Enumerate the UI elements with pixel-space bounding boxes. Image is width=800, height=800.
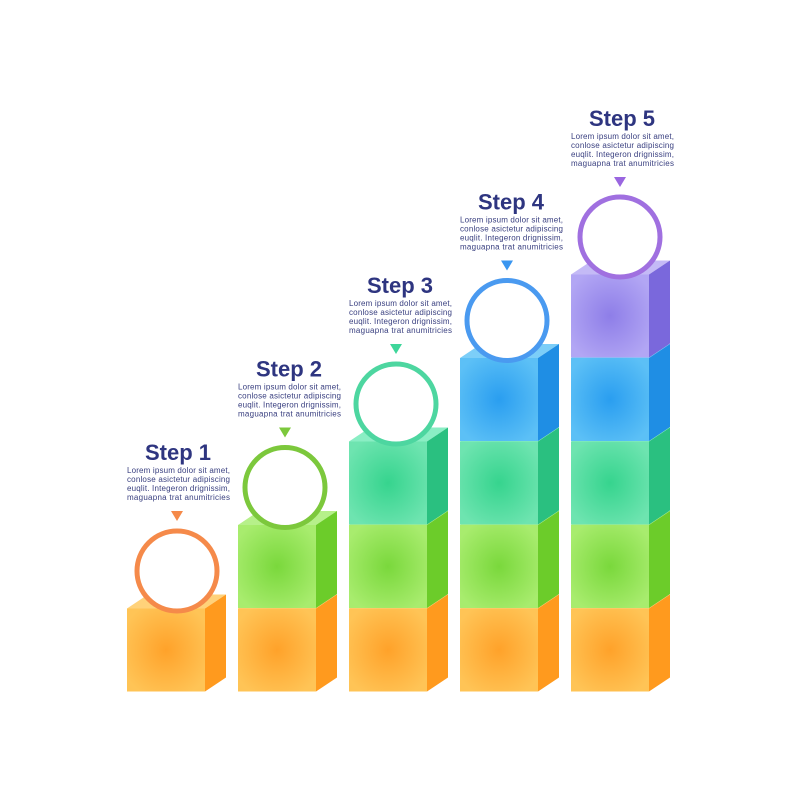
step 1 text: conlose asictetur adipiscing xyxy=(127,475,230,484)
step 5 title: Step 5 xyxy=(589,106,655,131)
step 4 text xyxy=(460,216,563,252)
step 5 text: conlose asictetur adipiscing xyxy=(571,141,674,150)
step 3 text xyxy=(349,299,452,335)
step 5 circle xyxy=(580,197,660,277)
step 4 circle xyxy=(467,280,547,360)
step 3 text: conlose asictetur adipiscing xyxy=(349,308,452,317)
step 5 text: euqlit. Integeron drignissim, xyxy=(571,150,674,159)
step 3 text: maguapna trat anumitricies xyxy=(349,326,452,335)
step 2 xyxy=(238,356,341,528)
step 4 text: Lorem ipsum dolor sit amet, xyxy=(460,216,563,224)
step 2 text xyxy=(238,382,341,418)
step 1 xyxy=(127,440,230,611)
step 3 text: euqlit. Integeron drignissim, xyxy=(349,317,452,326)
step 4 xyxy=(460,190,563,360)
step 2 circle xyxy=(245,448,325,528)
step 5 arrow xyxy=(614,177,626,187)
step 1 text: maguapna trat anumitricies xyxy=(127,493,230,502)
step 2 text: Lorem ipsum dolor sit amet, xyxy=(238,382,341,392)
step 4 text: euqlit. Integeron drignissim, xyxy=(460,234,563,242)
column 4 cubes xyxy=(460,344,559,692)
column 3 cubes xyxy=(349,428,448,692)
step 2 title: Step 2 xyxy=(256,356,322,382)
column 2 cubes xyxy=(238,511,337,692)
column 5 cubes xyxy=(571,260,670,692)
step 4 title: Step 4 xyxy=(478,190,545,214)
step 5 xyxy=(571,106,674,277)
step 2 text: euqlit. Integeron drignissim, xyxy=(238,400,341,410)
step 3 title: Step 3 xyxy=(367,273,433,298)
step 4 text: maguapna trat anumitricies xyxy=(460,242,563,252)
step 1 text: Lorem ipsum dolor sit amet, xyxy=(127,466,230,475)
step 5 text: maguapna trat anumitricies xyxy=(571,159,674,168)
step 3 arrow xyxy=(390,344,402,354)
step 1 title: Step 1 xyxy=(145,440,211,465)
step 3 text: Lorem ipsum dolor sit amet, xyxy=(349,299,452,308)
step 5 text xyxy=(571,132,674,168)
step 5 text: Lorem ipsum dolor sit amet, xyxy=(571,132,674,141)
step 1 circle xyxy=(137,531,217,611)
column 1 cubes xyxy=(127,594,226,692)
step 2 text: maguapna trat anumitricies xyxy=(238,410,341,418)
step 2 arrow xyxy=(279,428,291,438)
step 4 arrow xyxy=(501,260,513,270)
step 1 text: euqlit. Integeron drignissim, xyxy=(127,484,230,493)
step 4 text: conlose asictetur adipiscing xyxy=(460,224,563,234)
step 3 circle xyxy=(356,364,436,444)
step 3 xyxy=(349,273,452,444)
step 1 arrow xyxy=(171,511,183,521)
step 2 text: conlose asictetur adipiscing xyxy=(238,392,341,400)
step 1 text xyxy=(127,466,230,502)
